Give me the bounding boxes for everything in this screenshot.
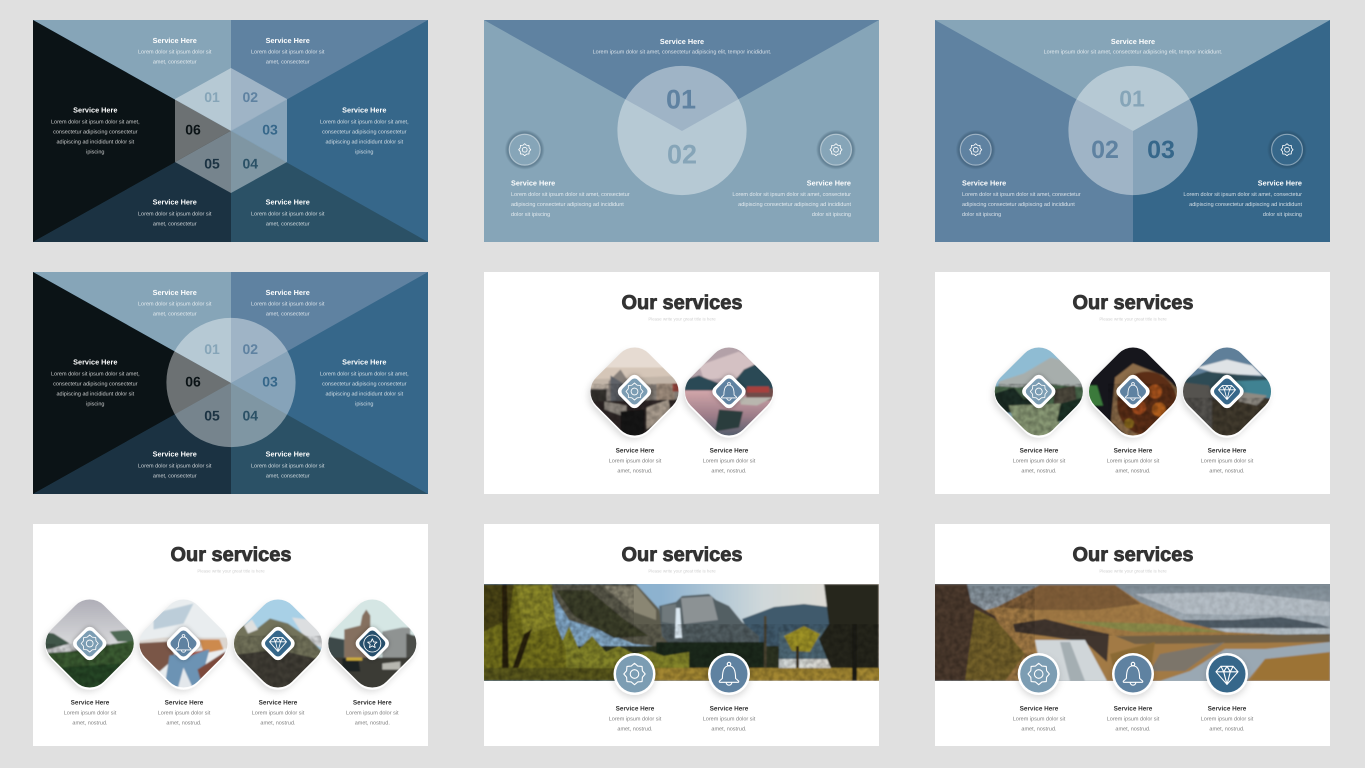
service text: top: Service Here (1111, 37, 1155, 46)
service text: right: Lorem dolor sit ipsum dolor sit amet, consectetur (732, 192, 851, 198)
hexagon numbers (185, 89, 278, 172)
service text 1: Service Here (71, 700, 110, 706)
panel: six-part circle slide (33, 272, 428, 494)
service text 3 (1201, 705, 1254, 732)
service text 1: Lorem ipsum dolor sit (609, 458, 662, 464)
service text: top (1044, 37, 1223, 56)
icon: left gear badge (956, 130, 996, 170)
panel: six-part hexagon slide (33, 20, 428, 242)
service text: left (51, 106, 140, 156)
service text: top left (138, 36, 212, 66)
panel: three photo diamonds slide (935, 272, 1330, 494)
icon: right gear badge (816, 130, 856, 170)
service text 4: Service Here (353, 700, 392, 706)
number 01: 01 (1119, 86, 1145, 112)
service text: right: Lorem dolor sit ipsum dolor sit amet, consectetur (1183, 192, 1302, 198)
service text: bottom right: amet, consectetur (266, 221, 310, 227)
service text: left: dolor sit ipiscing (511, 212, 550, 218)
service text: top: Lorem ipsum dolor sit amet, consectetur adipiscing elit, tempor incididunt. (593, 50, 772, 56)
number 03: 03 (1147, 136, 1175, 164)
heading: Our services (1072, 544, 1194, 566)
service text: right: adipiscing ad incididunt dolor sit (325, 140, 404, 146)
heading: Our services (622, 292, 742, 314)
service text: right: ipiscing (355, 150, 373, 156)
service text 1: Lorem ipsum dolor sit (64, 710, 117, 716)
icon: gear circle (1018, 653, 1060, 695)
service text 1: amet, nostrud. (617, 726, 653, 732)
service text 1: amet, nostrud. (72, 720, 108, 726)
circle numbers: 01 (204, 341, 220, 357)
service text 2: Lorem ipsum dolor sit (1107, 716, 1160, 722)
slide background (33, 524, 428, 746)
hexagon numbers: 05 (204, 156, 220, 172)
service text 1 (64, 700, 117, 726)
heading: Please write your great title is here (648, 317, 716, 322)
service text 2: amet, nostrud. (1115, 726, 1151, 732)
service text 4: amet, nostrud. (355, 720, 390, 726)
service text: left: Lorem dolor sit ipsum dolor sit amet, consectetur (511, 192, 630, 198)
service text: bottom left: Service Here (153, 450, 197, 458)
service text: top left: Service Here (153, 36, 197, 45)
service text: bottom left: amet, consectetur (153, 221, 197, 227)
service text: left (962, 178, 1081, 218)
background shapes (484, 20, 879, 242)
service text 3 (1201, 448, 1254, 474)
service text 2: Service Here (710, 705, 749, 712)
service text 3: Service Here (259, 700, 298, 706)
service text: bottom left: Service Here (153, 198, 197, 206)
service text 1: Service Here (1020, 448, 1059, 454)
photo diamond: snowy peak (230, 600, 322, 694)
photo banner: mountain and waterfall (935, 584, 1330, 681)
service text 1: Service Here (616, 448, 655, 454)
service text 3: amet, nostrud. (1209, 468, 1245, 474)
panel: valley banner slide (479, 524, 884, 746)
hexagon numbers: 03 (262, 122, 278, 138)
service text: bottom right: amet, consectetur (266, 473, 310, 479)
circle numbers: 03 (262, 374, 278, 390)
photo banner: valley and waterfall (484, 584, 879, 681)
photo diamond: lake (681, 348, 773, 442)
service text 1 (609, 448, 662, 474)
service text 2: amet, nostrud. (1115, 468, 1151, 474)
service text 1 (609, 705, 662, 732)
service text: right: adipiscing ad incididunt dolor sit (325, 392, 404, 398)
panel: three-part circle slide (935, 20, 1330, 242)
photo diamond: city towers (324, 600, 416, 694)
service text: top right: Service Here (266, 36, 310, 45)
service text: right (320, 358, 409, 408)
icon: right gear badge (1267, 130, 1307, 170)
photo diamond: pizza (1085, 348, 1178, 442)
service text 2: Lorem ipsum dolor sit (703, 716, 756, 722)
service text: left: Service Here (73, 106, 117, 114)
service text 2: Service Here (165, 700, 204, 706)
icon: left gear badge (505, 130, 545, 170)
service text 1: Lorem ipsum dolor sit (1013, 458, 1066, 464)
service text 1: amet, nostrud. (1021, 468, 1057, 474)
service text: bottom left: amet, consectetur (153, 473, 197, 479)
circle numbers: 04 (243, 408, 258, 424)
service text: bottom right: Lorem dolor sit ipsum dolor sit (251, 212, 325, 218)
service text: left (51, 358, 140, 408)
heading: Please write your great title is here (648, 569, 716, 574)
circle numbers: 06 (185, 374, 201, 390)
service text: top left: Lorem dolor sit ipsum dolor sit (138, 302, 212, 308)
service text 3: amet, nostrud. (1209, 726, 1245, 732)
service text: bottom left (138, 198, 212, 227)
service text: left: adipiscing ad incididunt dolor sit (56, 392, 135, 398)
service text: left: consectetur adipiscing consectetur (53, 382, 138, 388)
circle numbers (185, 341, 278, 424)
photo diamond: misty forest (42, 600, 134, 694)
service text: right: Service Here (342, 358, 386, 366)
service text: right: Service Here (1258, 178, 1302, 188)
hexagon numbers: 01 (204, 89, 220, 105)
service text 2: Service Here (1114, 705, 1153, 712)
service text 2: Lorem ipsum dolor sit (158, 710, 211, 716)
service text: top left: amet, consectetur (153, 60, 197, 66)
service text: right: Service Here (807, 178, 851, 188)
circle overlay (617, 66, 747, 195)
number 02: 02 (1091, 136, 1119, 164)
circle numbers: 02 (243, 341, 258, 357)
service text 2 (1107, 448, 1160, 474)
service text: top left (138, 288, 212, 318)
service text: bottom left (138, 450, 212, 479)
service text 3: Lorem ipsum dolor sit (252, 710, 305, 716)
service text 2: Lorem ipsum dolor sit (703, 458, 756, 464)
service text: top left: Service Here (153, 288, 197, 297)
service text: top left: Lorem dolor sit ipsum dolor sit (138, 50, 212, 56)
service text: bottom right (251, 198, 325, 227)
service text 1 (1013, 448, 1066, 474)
service text: right: consectetur adipiscing consectetur (322, 130, 407, 136)
photo diamond: mountain lake (1179, 348, 1272, 442)
service text: left: Lorem dolor sit ipsum dolor sit amet, consectetur (962, 192, 1081, 198)
service text 1: amet, nostrud. (1021, 726, 1057, 732)
icon: bell circle (1112, 653, 1154, 695)
service text 3: Service Here (1208, 705, 1247, 712)
service text 3: Lorem ipsum dolor sit (1201, 716, 1254, 722)
service text: top right: Service Here (266, 288, 310, 297)
number 01: 01 (666, 84, 696, 114)
wedge backgrounds (33, 20, 428, 242)
slide background (935, 272, 1330, 494)
slide background (484, 272, 879, 494)
service text 2: amet, nostrud. (711, 726, 747, 732)
service text: bottom left: Lorem dolor sit ipsum dolor sit (138, 464, 212, 470)
service text: top left: amet, consectetur (153, 312, 197, 318)
heading: Please write your great title is here (1099, 569, 1167, 574)
service text: left: adipiscing ad incididunt dolor sit (56, 140, 135, 146)
hexagon numbers: 04 (243, 156, 258, 172)
hexagon numbers: 02 (243, 89, 258, 105)
service text: left: ipiscing (86, 402, 104, 408)
photo diamond: alpine meadow (990, 348, 1083, 442)
circle overlay (1068, 66, 1198, 195)
service text: left: Lorem dolor sit ipsum dolor sit amet, (51, 372, 140, 378)
service text: left: ipiscing (86, 150, 104, 156)
service text 2: Service Here (1114, 448, 1153, 454)
photo diamond: city (586, 348, 678, 442)
service text 4 (346, 700, 399, 726)
service text: bottom right (251, 450, 325, 479)
service text: top right: amet, consectetur (266, 60, 310, 66)
service text 3: Lorem ipsum dolor sit (1201, 458, 1254, 464)
service text 1: Service Here (616, 705, 655, 712)
circle numbers: 05 (204, 408, 220, 424)
service text: right: dolor sit ipiscing (1263, 212, 1302, 218)
heading: Our services (622, 544, 742, 566)
service text 2 (703, 448, 756, 474)
slide background (484, 524, 879, 746)
service text 1: Service Here (1020, 705, 1059, 712)
service text: left: Service Here (73, 358, 117, 366)
service text 2 (158, 700, 211, 726)
service text 4: Lorem ipsum dolor sit (346, 710, 399, 716)
wedge backgrounds (33, 272, 428, 494)
service text: top right: Lorem dolor sit ipsum dolor sit (251, 50, 325, 56)
service text 2: Service Here (710, 448, 749, 454)
service text: bottom right: Service Here (266, 198, 310, 206)
service text: right: Lorem dolor sit ipsum dolor sit amet, (320, 120, 409, 126)
service text 1: Lorem ipsum dolor sit (609, 716, 662, 722)
service text: left: consectetur adipiscing consectetur (53, 130, 138, 136)
slide background (935, 524, 1330, 746)
service text: right: Lorem dolor sit ipsum dolor sit amet, (320, 372, 409, 378)
photo diamond: sunset town (136, 600, 228, 694)
panel: four photo diamonds slide (33, 524, 428, 746)
service text 2 (703, 705, 756, 732)
icon: gear circle (614, 653, 656, 695)
service text 3 (252, 700, 305, 726)
panel: two photo diamonds slide (484, 272, 879, 494)
service text 1 (1013, 705, 1066, 732)
service text: right: consectetur adipiscing consectetur (322, 382, 407, 388)
service text 3: Service Here (1208, 448, 1247, 454)
icon: gem circle (1206, 653, 1248, 695)
service text: left: Lorem dolor sit ipsum dolor sit amet, (51, 120, 140, 126)
service text: top: Service Here (660, 37, 704, 46)
service text 1: amet, nostrud. (617, 468, 653, 474)
panel: two-part circle slide (484, 20, 879, 242)
number 02: 02 (667, 140, 697, 170)
background shapes (935, 20, 1330, 242)
panel: mountain banner slide (930, 524, 1335, 746)
circle overlay (166, 318, 296, 447)
service text: left (511, 178, 630, 218)
icon: bell circle (708, 653, 750, 695)
service text: left: adipiscing consectetur adipiscing ad incididunt (962, 202, 1075, 208)
service text: right: Service Here (342, 106, 386, 114)
service text: bottom right: Service Here (266, 450, 310, 458)
service text 2: Lorem ipsum dolor sit (1107, 458, 1160, 464)
hexagon (175, 68, 287, 193)
service text: bottom right: Lorem dolor sit ipsum dolor sit (251, 464, 325, 470)
service text: top right (251, 288, 325, 318)
service text: left: adipiscing consectetur adipiscing ad incididunt (511, 202, 624, 208)
service text 2 (1107, 705, 1160, 732)
service text: right (320, 106, 409, 156)
service text: right: adipiscing consectetur adipiscing ad incididunt (738, 202, 851, 208)
service text 2: amet, nostrud. (166, 720, 202, 726)
service text: right: dolor sit ipiscing (812, 212, 851, 218)
service text: right (1183, 178, 1302, 218)
service text: top right: amet, consectetur (266, 312, 310, 318)
service text: top right: Lorem dolor sit ipsum dolor sit (251, 302, 325, 308)
heading: Our services (1072, 292, 1194, 314)
heading: Our services (170, 544, 292, 566)
service text: left: Service Here (962, 178, 1006, 188)
service text: bottom left: Lorem dolor sit ipsum dolor sit (138, 212, 212, 218)
service text: left: dolor sit ipiscing (962, 212, 1001, 218)
heading: Please write your great title is here (1099, 317, 1167, 322)
service text: right: ipiscing (355, 402, 373, 408)
service text 1: Lorem ipsum dolor sit (1013, 716, 1066, 722)
service text: top right (251, 36, 325, 66)
service text 3: amet, nostrud. (260, 720, 296, 726)
service text: right (732, 178, 851, 218)
service text: top (593, 37, 772, 56)
service text: top: Lorem ipsum dolor sit amet, consectetur adipiscing elit, tempor incididunt. (1044, 50, 1223, 56)
heading: Please write your great title is here (197, 569, 265, 574)
service text 2: amet, nostrud. (711, 468, 747, 474)
service text: left: Service Here (511, 178, 555, 188)
service text: right: adipiscing consectetur adipiscing ad incididunt (1189, 202, 1302, 208)
hexagon numbers: 06 (185, 122, 201, 138)
